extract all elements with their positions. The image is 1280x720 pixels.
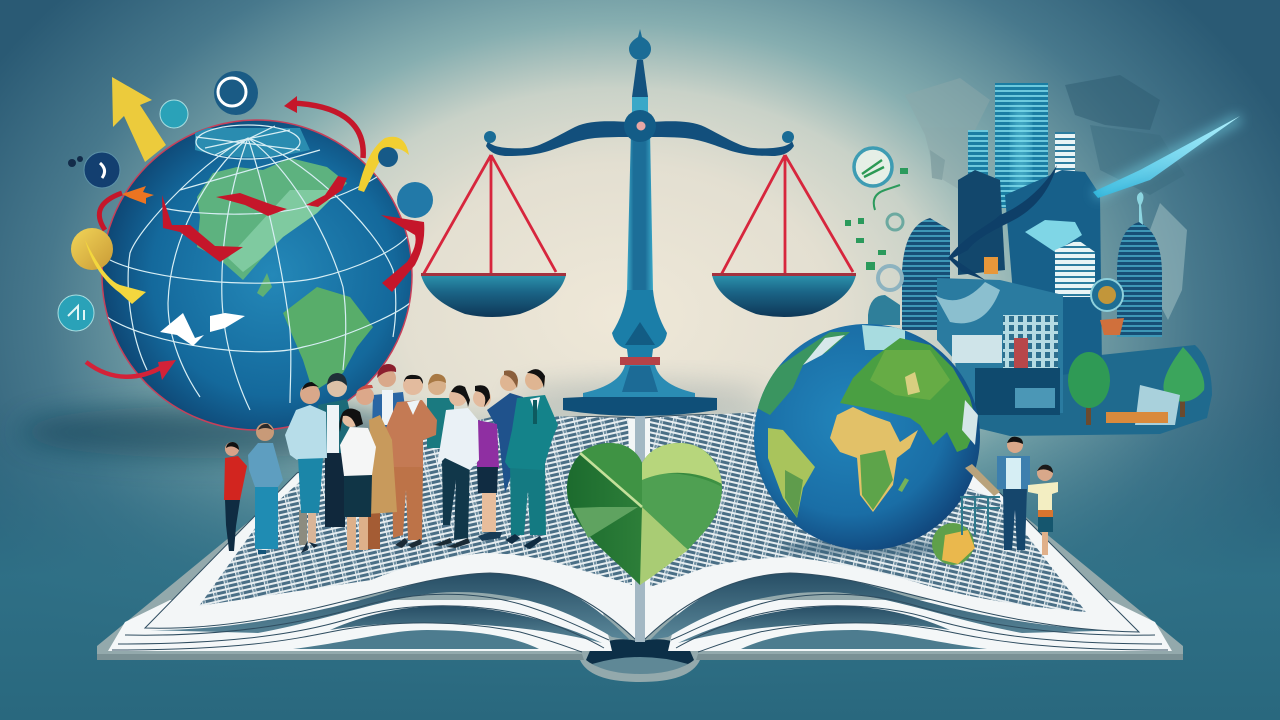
person: navy jacket xyxy=(487,370,523,493)
child xyxy=(1028,465,1058,555)
dome left tower xyxy=(902,218,950,330)
heart left light patch xyxy=(573,507,638,538)
red arrow right xyxy=(381,215,424,292)
ice cap xyxy=(862,325,905,350)
right base leaves xyxy=(668,600,1172,651)
gold ball xyxy=(932,523,975,565)
small green icons xyxy=(845,168,908,270)
south america green xyxy=(785,470,803,518)
bulb dark facet xyxy=(625,322,655,345)
yellow arrow xyxy=(112,77,166,162)
gold coin xyxy=(71,228,113,270)
north america light band xyxy=(228,190,340,272)
beam end ball left xyxy=(484,131,496,143)
tower glow xyxy=(1014,105,1028,195)
lower window xyxy=(1015,388,1055,408)
man xyxy=(997,437,1030,550)
icon navy xyxy=(68,152,120,188)
cover underside shadow xyxy=(97,654,1183,660)
globe sphere xyxy=(754,324,980,550)
central island xyxy=(257,273,272,297)
madagascar xyxy=(898,478,909,492)
right page stack xyxy=(650,573,1172,652)
eurasia pale patch xyxy=(905,372,920,395)
grid lines xyxy=(107,125,410,410)
white shapes xyxy=(160,313,245,346)
cart xyxy=(960,497,1000,535)
lower cone xyxy=(583,365,695,399)
beam left arm xyxy=(486,121,630,156)
right middle gap xyxy=(678,606,950,643)
right page xyxy=(644,415,1139,640)
heart top band xyxy=(580,443,642,507)
globe shadow xyxy=(780,540,960,556)
ring xyxy=(878,266,902,290)
south america xyxy=(768,428,815,518)
pole bulb xyxy=(612,290,667,357)
globe arrows and icons xyxy=(58,71,433,380)
person: blue suit red hair xyxy=(372,364,408,430)
gold emblem centre xyxy=(1098,286,1116,304)
person: brown suit xyxy=(385,375,437,548)
right upper gap xyxy=(650,573,1135,640)
africa green xyxy=(860,450,893,510)
icon teal lower xyxy=(58,295,94,331)
americas north xyxy=(757,332,850,415)
right page text xyxy=(650,412,1086,612)
left bottom gap xyxy=(293,630,539,649)
person: purple xyxy=(473,385,502,541)
spine xyxy=(635,416,645,642)
left pan xyxy=(421,275,566,317)
hub centre xyxy=(636,122,646,130)
south america xyxy=(283,287,373,392)
globe sphere xyxy=(102,120,412,430)
red arrowhead bottom xyxy=(158,360,176,380)
north ice xyxy=(195,128,310,158)
left page text xyxy=(199,415,632,606)
right pan xyxy=(712,275,856,317)
person: red dress xyxy=(224,442,247,551)
open book xyxy=(97,412,1183,682)
beam glow xyxy=(1095,118,1240,195)
left leaf lines xyxy=(112,594,609,652)
spine notch lower xyxy=(592,657,688,674)
left page xyxy=(145,417,636,640)
person: tan coat xyxy=(356,385,397,549)
person: white shirt xyxy=(434,385,479,548)
city illustration xyxy=(845,83,1240,436)
spire on right tower xyxy=(1137,192,1144,225)
heart xyxy=(567,443,722,585)
left strings xyxy=(423,155,556,275)
dome right tower xyxy=(1117,222,1162,337)
red arc left xyxy=(99,193,122,230)
gold emblem xyxy=(1091,279,1123,311)
pole xyxy=(627,130,653,290)
central block xyxy=(1005,170,1102,380)
person: light jacket xyxy=(285,382,327,553)
icon teal upper xyxy=(160,100,188,128)
beam end ball right xyxy=(782,131,794,143)
tree right xyxy=(1163,347,1204,417)
red arrow bottom xyxy=(86,362,164,377)
right strings xyxy=(721,155,853,275)
ribbon xyxy=(948,165,1057,280)
hub xyxy=(624,110,656,142)
left middle gap xyxy=(330,606,602,643)
left page stack xyxy=(108,573,630,652)
left base leaves xyxy=(108,600,612,651)
red arrow upper xyxy=(306,176,347,207)
right bottom gap xyxy=(741,630,987,649)
right rim xyxy=(712,273,856,276)
americas ice xyxy=(803,335,845,365)
orange base strip xyxy=(1106,412,1168,423)
left machine xyxy=(868,295,900,325)
yellow comet xyxy=(85,240,146,304)
eurasia bright xyxy=(870,350,950,400)
icon blue right xyxy=(397,182,433,218)
window figure xyxy=(1014,338,1028,368)
red arc top right xyxy=(292,103,363,158)
light beam xyxy=(1093,116,1240,198)
base platform xyxy=(960,345,1212,436)
gauge leaf xyxy=(862,160,884,177)
heart right lobe light xyxy=(642,443,722,484)
beam right arm xyxy=(650,121,794,156)
right leaf lines xyxy=(671,594,1168,652)
north america xyxy=(197,158,347,280)
person: teal suit xyxy=(505,369,558,549)
person: blue outfit xyxy=(248,423,283,554)
person: white top xyxy=(339,408,376,550)
lower building xyxy=(937,278,1063,415)
heart vein xyxy=(580,453,642,507)
white panel xyxy=(952,335,1002,363)
pot xyxy=(1100,318,1124,335)
heart right mid xyxy=(642,473,722,550)
africa xyxy=(830,407,918,512)
person: back teal jacket xyxy=(427,374,454,448)
faded world map behind city xyxy=(905,75,1187,320)
curved roof xyxy=(935,282,1000,323)
cover xyxy=(97,500,1183,682)
collar xyxy=(620,357,660,365)
group of people xyxy=(224,364,558,554)
yellow swirl xyxy=(358,137,409,192)
person: dark jacket xyxy=(318,373,350,527)
small tower left xyxy=(968,130,988,178)
orange window xyxy=(984,257,998,274)
orange burst xyxy=(122,186,154,204)
heart bottom wedge xyxy=(640,507,688,585)
top tower xyxy=(995,83,1048,208)
window block xyxy=(1003,315,1058,370)
heart shape xyxy=(567,443,722,585)
spine notch xyxy=(586,639,694,672)
red arrow v-shape xyxy=(162,195,243,262)
pole upper xyxy=(632,97,648,121)
left upper gap xyxy=(145,573,630,640)
east cloud xyxy=(962,400,978,445)
small tower right xyxy=(1055,132,1075,174)
left rim xyxy=(421,273,566,276)
right pair of people xyxy=(997,437,1058,555)
cone dark facet xyxy=(622,366,658,392)
lower dark block xyxy=(975,368,1060,415)
white striped building xyxy=(1055,240,1095,297)
base plate xyxy=(563,397,717,416)
eurasia xyxy=(840,338,977,452)
balance scale xyxy=(421,29,856,416)
blue swirl centre xyxy=(378,147,398,167)
gauge icon xyxy=(854,148,892,186)
right globe xyxy=(754,324,1000,565)
red arrowhead top right xyxy=(284,96,297,113)
tree left xyxy=(1068,352,1110,425)
diamond roof xyxy=(1025,220,1082,252)
finial ball and tip xyxy=(629,29,651,60)
white fountain xyxy=(1135,385,1180,425)
dark central tower xyxy=(958,170,1005,275)
icon top xyxy=(214,71,258,115)
finial neck xyxy=(632,60,648,97)
tool brush xyxy=(965,464,1000,496)
red arrow middle xyxy=(216,193,287,216)
left globe xyxy=(102,120,412,430)
